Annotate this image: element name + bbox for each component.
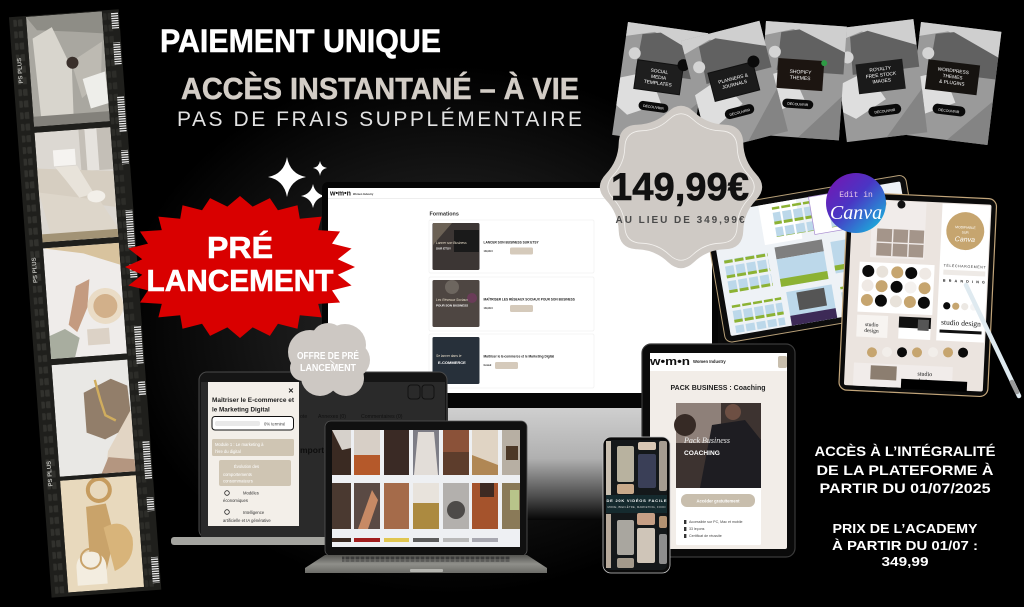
back laptop with module menu: Annexes (0) bbox=[318, 414, 346, 420]
back laptop with module menu: Commentaires (0) bbox=[361, 414, 403, 420]
thumbnail: wordpress themes bbox=[907, 22, 1001, 145]
text block: prix de l'academy: À PARTIR DU 01/07 : bbox=[832, 538, 978, 553]
back laptop with module menu: ote bbox=[300, 414, 307, 420]
text block: prix de l'academy bbox=[832, 522, 978, 569]
course menu panel: économiques bbox=[223, 498, 248, 503]
thumbnail: royalty free stock images bbox=[833, 19, 927, 142]
thumbnail: social media templates: TEMPLATES bbox=[643, 79, 672, 89]
desktop monitor with courses: Women Industry bbox=[353, 192, 374, 196]
white brand column: Canva bbox=[955, 236, 975, 244]
phone with video collage: DE 20K VIDÉOS FACILE bbox=[606, 498, 667, 503]
white brand column: studio design bbox=[941, 318, 981, 328]
thumbnail: royalty free stock images: ROYALTY bbox=[869, 65, 892, 74]
thumbnail: royalty free stock images: FREE STOCK bbox=[865, 71, 897, 80]
course card 3: Maîtriser le E-commerce et le Marketing Digital bbox=[484, 354, 554, 358]
phone with video collage bbox=[603, 437, 670, 573]
film strip with five photos: PS PLUS bbox=[47, 461, 54, 487]
text block: accès à la plateforme: ACCÈS À L’INTÉGRALITÉ bbox=[814, 443, 996, 459]
course menu panel: Évolution des bbox=[234, 464, 259, 469]
course menu panel: Intelligence bbox=[243, 510, 265, 515]
coaching card bbox=[674, 403, 761, 545]
thumbnail: planners and journals: JOURNALS bbox=[722, 79, 748, 91]
photo: woman in robe on sofa bbox=[26, 12, 110, 127]
film strip with five photos bbox=[9, 9, 161, 598]
back laptop with module menu bbox=[171, 372, 453, 545]
front tablet with brand kit bbox=[839, 192, 997, 397]
course menu panel: le Marketing Digital bbox=[212, 406, 270, 414]
text block: prix de l'academy: PRIX DE L’ACADEMY bbox=[832, 522, 978, 536]
thumbnail: shopify themes: SHOPIFY bbox=[789, 69, 812, 76]
icon: stylus pencil bbox=[966, 285, 1019, 396]
text block: prix de l'academy: 349,99 bbox=[882, 555, 929, 569]
front tablet with brand kit: design bbox=[917, 378, 933, 385]
text block: accès à la plateforme: DE LA PLATEFORME À bbox=[816, 462, 994, 478]
coaching card: Certificat de réussite bbox=[689, 534, 722, 538]
icon: edit in canva badge: Canva bbox=[830, 202, 882, 224]
photo: laptop on beige sofa bbox=[34, 127, 118, 242]
thumbnail: wordpress themes: WORDPRESS bbox=[937, 66, 969, 76]
icon: edit in canva badge bbox=[826, 173, 886, 233]
thumbnail: planners and journals: DÉCOUVRIR bbox=[729, 107, 751, 117]
price badge: 149,99€ bbox=[611, 166, 749, 209]
text block: accès à la plateforme: PARTIR DU 01/07/2025 bbox=[820, 480, 991, 496]
course card 1: SUR ETSY bbox=[436, 246, 451, 250]
thumbnail: shopify themes: DÉCOUVRIR bbox=[787, 101, 809, 107]
thumbnail: social media templates: SOCIAL bbox=[650, 68, 669, 76]
white brand column bbox=[936, 203, 991, 343]
course card 1: 149,99 € bbox=[484, 250, 493, 253]
tablet: pack business coaching bbox=[642, 344, 795, 557]
photo moodboard bbox=[870, 199, 927, 260]
front laptop with photo grid bbox=[305, 421, 547, 573]
thumbnail: planners and journals bbox=[681, 21, 788, 151]
coaching card: Pack Business bbox=[683, 436, 730, 445]
tablet: pack business coaching: PACK BUSINESS : Coaching bbox=[670, 383, 766, 392]
coaching card: Accéder gratuitement bbox=[696, 498, 740, 504]
course card 1: Lancer son Business bbox=[436, 241, 467, 245]
desktop monitor with courses bbox=[322, 182, 718, 520]
course card 3 bbox=[429, 334, 594, 388]
course card 3: Se lancer dans le bbox=[436, 354, 462, 358]
course card 2: Les Réseaux Sociaux bbox=[436, 298, 468, 302]
heading: accès instantané à vie: ACCÈS INSTANTANÉ – À VIE bbox=[181, 71, 579, 106]
cloud badge: offre de pré lancement: LANCEMENT bbox=[300, 363, 356, 374]
icon panel bbox=[857, 262, 935, 315]
course menu panel: Module 1 : Le marketing à bbox=[215, 442, 264, 447]
course menu panel: l'ère du digital bbox=[215, 449, 241, 454]
course card 2 bbox=[429, 277, 594, 331]
logo cards: design bbox=[864, 328, 879, 335]
thumbnail: wordpress themes: & PLUGINS bbox=[939, 79, 965, 88]
course menu panel bbox=[208, 382, 299, 526]
course menu panel: 0% terminé bbox=[264, 422, 286, 426]
thumbnail: wordpress themes: THEMES bbox=[942, 73, 963, 81]
thumbnail: social media templates: MEDIA bbox=[651, 74, 667, 82]
phone with video collage: MODE, BIEN-ÊTRE, MARKETING, FOOD bbox=[608, 504, 666, 509]
icon: sparkles bbox=[268, 157, 327, 208]
course card 3: Gratuit bbox=[484, 364, 492, 367]
heading: paiement unique: PAIEMENT UNIQUE bbox=[160, 23, 441, 59]
course card 2: MAÎTRISER LES RÉSEAUX SOCIAUX POUR SON BUSINESS bbox=[484, 296, 575, 302]
logo cards: studio bbox=[865, 322, 879, 329]
film strip with five photos: PS PLUS bbox=[32, 257, 39, 283]
thumbnail: planners and journals: PLANNERS & bbox=[718, 72, 749, 86]
desktop monitor with courses: Formations bbox=[430, 212, 459, 218]
cloud badge: offre de pré lancement bbox=[288, 323, 370, 396]
thumbnail: royalty free stock images: DÉCOUVRIR bbox=[874, 107, 896, 115]
coaching card: Accessible sur PC, Mac et mobile bbox=[689, 520, 743, 524]
desktop monitor with courses: w•m•n bbox=[329, 190, 351, 198]
white brand column: TÉLÉCHARGEMENT bbox=[944, 263, 987, 270]
course card 2: POUR SON BUSINESS bbox=[436, 304, 468, 308]
tablet: pack business coaching: Women Industry bbox=[693, 359, 726, 364]
thumbnail: social media templates bbox=[612, 22, 708, 146]
thumbnail: wordpress themes: DÉCOUVRIR bbox=[938, 107, 960, 114]
course card 2: 149,99 € bbox=[484, 307, 493, 310]
social icon row bbox=[867, 343, 968, 362]
white brand column: SUR bbox=[962, 230, 969, 235]
price badge: AU LIEU DE 349,99€ bbox=[616, 215, 745, 226]
film strip with five photos: PS PLUS bbox=[17, 58, 25, 84]
photo grid row 2 bbox=[332, 483, 520, 529]
white brand column: MODIFIABLE bbox=[955, 225, 977, 230]
photo: woven bag bbox=[52, 360, 136, 477]
thumbnail: royalty free stock images: IMAGES bbox=[872, 77, 891, 86]
coaching card: 33 leçons bbox=[689, 527, 705, 531]
photo: gold key rings bbox=[60, 475, 144, 592]
red starburst: pré lancement: LANCEMENT bbox=[146, 263, 334, 298]
course card 1 bbox=[429, 220, 594, 273]
subheading: pas de frais supplémentaire: PAS DE FRAIS SUPPLÉMENTAIRE bbox=[177, 108, 582, 131]
white brand column: BRANDING bbox=[943, 279, 985, 285]
tablet: pack business coaching: w•m•n bbox=[649, 356, 690, 368]
photo: hand and coffee bbox=[43, 242, 127, 360]
thumbnail: shopify themes: THEMES bbox=[789, 75, 811, 82]
course menu panel: consommateurs bbox=[223, 478, 253, 484]
text block: accès à la plateforme bbox=[814, 443, 996, 496]
price badge bbox=[600, 106, 762, 268]
course card 3: E-COMMERCE bbox=[438, 360, 466, 365]
coaching card: COACHING bbox=[684, 450, 720, 457]
red starburst: pré lancement: PRÉ bbox=[207, 230, 273, 265]
course menu panel: comportements bbox=[223, 472, 252, 477]
photo grid row 3 bbox=[332, 538, 498, 542]
course card 1: LANCER SON BUSINESS SUR ETSY bbox=[484, 240, 539, 244]
thumbnail: social media templates: DÉCOUVRIR bbox=[643, 103, 665, 111]
course menu panel: ✕ bbox=[288, 388, 294, 395]
back tablet with template pages bbox=[703, 174, 928, 343]
product thumbnails row bbox=[612, 19, 1001, 151]
icon: edit in canva badge: Edit in bbox=[839, 191, 873, 200]
back laptop with module menu: mporte bbox=[300, 445, 329, 455]
logo cards bbox=[856, 315, 931, 340]
course menu panel: Modèles bbox=[243, 490, 259, 496]
red starburst: pré lancement bbox=[125, 196, 355, 338]
thumbnail: shopify themes bbox=[758, 21, 847, 140]
front tablet with brand kit: studio bbox=[917, 371, 932, 378]
cloud badge: offre de pré lancement: OFFRE DE PRÉ bbox=[297, 349, 359, 362]
course menu panel: artificielle et IA générative bbox=[223, 518, 271, 523]
course menu panel: Maîtriser le E-commerce et bbox=[212, 397, 295, 404]
photo grid row 1 bbox=[332, 430, 520, 475]
